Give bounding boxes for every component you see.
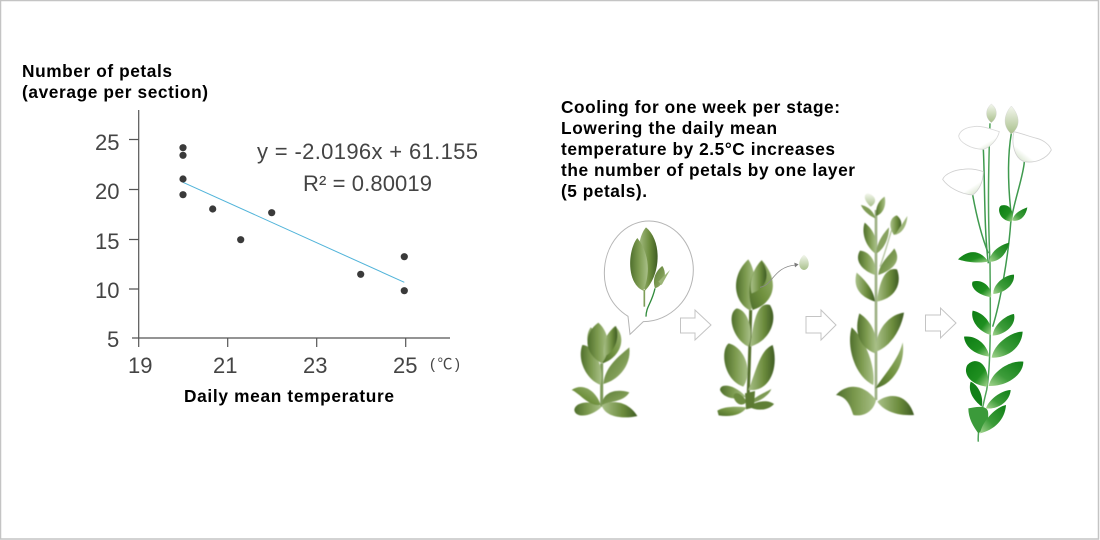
stem and leaves: [717, 259, 775, 416]
data points: [179, 144, 408, 294]
curved pointer to bud: [760, 265, 796, 287]
axes: [129, 110, 450, 347]
plant stage 1 with callout: [572, 221, 693, 417]
cooling description: Cooling for one week per stage:: [561, 97, 840, 117]
scatter chart: [95, 110, 478, 378]
regression equation: y = -2.0196x + 61.155: [257, 139, 478, 164]
stem and branch: [836, 193, 914, 415]
plant stage 4 in flower: [943, 104, 1051, 442]
y axis labels: [95, 130, 119, 352]
cooling description: Lowering the daily mean: [561, 118, 777, 138]
y axis labels: 15: [95, 229, 119, 254]
cooling description: the number of petals by one layer: [561, 160, 855, 180]
y axis labels: 20: [95, 179, 119, 204]
cooling description: temperature by 2.5°C increases: [561, 139, 835, 159]
stems: [973, 123, 1024, 442]
flowers: [943, 104, 1051, 195]
y axis title: [22, 61, 208, 102]
bud: [799, 255, 809, 270]
x axis labels: 23: [303, 353, 327, 378]
leaves: [836, 387, 876, 415]
arrow 3: [926, 308, 956, 338]
x axis labels: (℃): [430, 356, 460, 373]
x axis title: Daily mean temperature: [184, 386, 394, 406]
arrow 2: [806, 310, 836, 340]
regression equation: [257, 139, 478, 196]
callout bubble: [604, 221, 693, 334]
x axis labels: 21: [213, 353, 237, 378]
trend line: [183, 182, 404, 282]
x axis labels: [128, 353, 460, 378]
zoomed leaf and bud: [630, 227, 670, 317]
cooling description: (5 petals).: [561, 181, 647, 201]
y axis title: Number of petals: [22, 61, 172, 81]
y axis title: (average per section): [22, 82, 208, 102]
arrow 1: [680, 310, 711, 340]
y axis labels: 10: [95, 278, 119, 303]
x axis labels: 19: [128, 353, 152, 378]
leaves: [958, 205, 1027, 433]
plant stage 2: [717, 255, 809, 416]
x axis labels: 25: [393, 353, 417, 378]
y axis labels: 25: [95, 130, 119, 155]
y axis labels: 5: [107, 327, 119, 352]
regression equation: R² = 0.80019: [303, 171, 432, 196]
plant stage 3: [836, 193, 914, 415]
cooling description: [561, 97, 855, 201]
small plant: [572, 323, 637, 417]
